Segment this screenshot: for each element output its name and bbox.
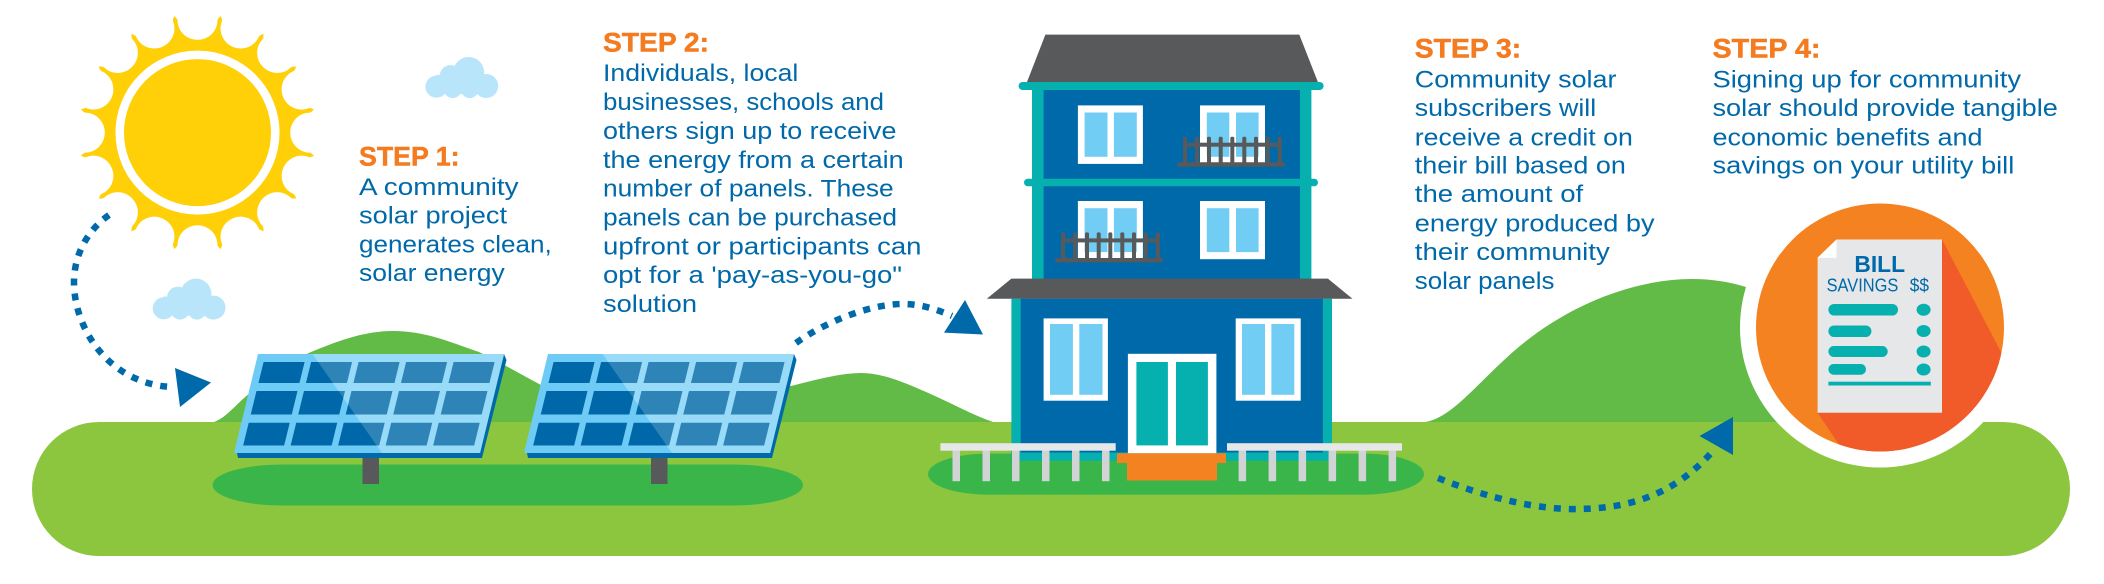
text: step 3: the amount of: [1415, 181, 1584, 208]
text: step 4: STEP 4:: [1712, 34, 1820, 64]
arrow: house to bill: [1438, 417, 1733, 509]
hill: left rolling hills: [214, 331, 993, 422]
text: step 2: number of panels. These: [603, 175, 894, 202]
window: ground left: [1044, 318, 1108, 401]
text: step 1: solar project: [359, 202, 507, 230]
upper walls: [1032, 86, 1311, 281]
icon: cloud lower: [153, 279, 226, 320]
shrub: ground shadow under house: [928, 454, 1424, 495]
fence: left: [940, 443, 1116, 481]
text: step 3: subscribers will: [1415, 95, 1596, 122]
text: step 2: businesses, schools and: [603, 89, 884, 116]
arrow: panels to house: [796, 300, 983, 343]
icon: sun: [78, 13, 317, 252]
door: [1128, 354, 1216, 453]
text: step 2: upfront or participants can: [603, 233, 922, 260]
text: step 4: Signing up for community: [1712, 66, 2021, 94]
balcony: top: [1177, 137, 1285, 167]
bill sheet: SAVINGS: [1827, 276, 1898, 296]
text: step 3: energy produced by: [1415, 210, 1655, 237]
post: panel 1: [362, 456, 379, 484]
badge: bill savings: [1740, 204, 2004, 468]
window: ground right: [1236, 318, 1301, 401]
text: step 1: [359, 142, 552, 287]
bill sheet: $$: [1910, 276, 1929, 296]
text: step 4: savings on your utility bill: [1712, 153, 2014, 180]
text: step 3: receive a credit on: [1415, 124, 1633, 151]
text: step 2: panels can be purchased: [603, 204, 897, 231]
text: step 1: STEP 1:: [359, 142, 460, 172]
arrow: sun to panels: [74, 215, 211, 407]
ground: [32, 422, 2070, 556]
text: step 3: solar panels: [1415, 268, 1554, 295]
text: step 2: [603, 27, 922, 318]
text: step 1: solar energy: [359, 260, 505, 287]
balcony: middle: [1055, 232, 1163, 262]
lower walls: [1011, 299, 1332, 461]
window: top left: [1078, 105, 1143, 164]
text: step 4: [1712, 34, 2058, 180]
text: step 3: STEP 3:: [1415, 34, 1521, 64]
text: step 3: their community: [1415, 239, 1610, 266]
text: step 1: generates clean,: [359, 232, 552, 258]
solar panel 1: [234, 354, 506, 458]
window: top right: [1200, 105, 1265, 164]
house: [940, 35, 1402, 481]
window: middle right: [1200, 201, 1265, 259]
text: step 3: their bill based on: [1415, 153, 1626, 180]
text: step 2: the energy from a certain: [603, 147, 904, 174]
bill sheet: BILL: [1854, 251, 1905, 277]
post: panel 2: [651, 456, 668, 484]
floor band: [1024, 179, 1318, 186]
upper roof: [1027, 35, 1318, 82]
window: middle left: [1078, 201, 1143, 259]
icon: cloud upper: [425, 57, 498, 98]
eave band: [1019, 82, 1324, 90]
lower roof: [987, 279, 1352, 299]
shrub: ground shadow under panels: [212, 464, 803, 506]
text: step 2: STEP 2:: [603, 27, 709, 57]
text: step 4: solar should provide tangible: [1712, 95, 2058, 122]
solar panel 2: [524, 354, 796, 458]
text: step 2: Individuals, local: [603, 60, 798, 87]
text: step 3: [1415, 34, 1655, 295]
text: step 3: Community solar: [1415, 66, 1616, 94]
text: step 2: solution: [603, 291, 697, 318]
fence: right: [1227, 443, 1402, 481]
text: step 2: others sign up to receive: [603, 118, 896, 145]
hill: right hill: [1425, 279, 1810, 430]
text: step 4: economic benefits and: [1712, 124, 1982, 151]
steps: [1117, 453, 1226, 480]
text: step 2: opt for a 'pay-as-you-go": [603, 262, 902, 289]
bill sheet: [1818, 240, 1942, 413]
text: step 1: A community: [359, 174, 519, 201]
